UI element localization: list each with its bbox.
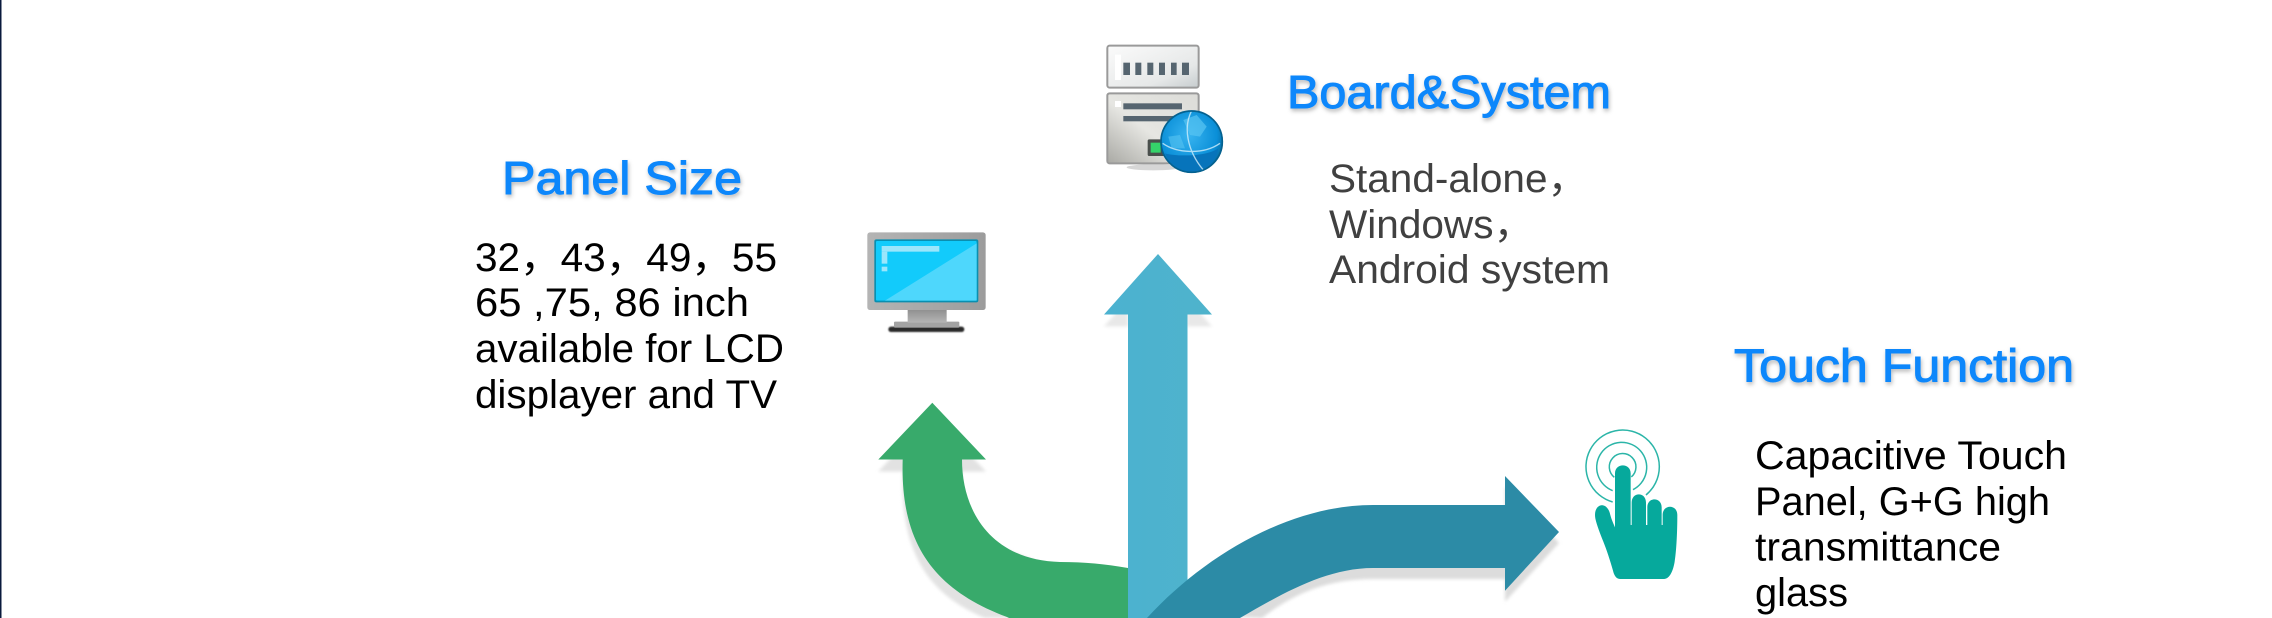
text block: touch function description: Panel, G+G high bbox=[1755, 480, 2050, 524]
hand bbox=[1595, 465, 1677, 579]
icon: monitor bbox=[867, 232, 986, 332]
icon: globe bbox=[1160, 110, 1223, 173]
text block: panel size description: displayer and TV bbox=[475, 373, 777, 417]
arrow: blue vertical up bbox=[1104, 254, 1212, 618]
text block: panel size description bbox=[475, 236, 784, 417]
text block: board and system description: Android system bbox=[1329, 248, 1610, 292]
heading: Board&System: Board&System bbox=[1287, 66, 1611, 118]
text block: touch function description: transmittance bbox=[1755, 526, 2001, 570]
arrow: teal curved right bbox=[1147, 476, 1559, 618]
icon: server with globe bbox=[1107, 46, 1223, 173]
touch rings bbox=[1586, 430, 1659, 502]
text block: panel size description: available for LCD bbox=[475, 327, 784, 371]
text block: touch function description bbox=[1755, 434, 2067, 615]
text block: board and system description: Windows， bbox=[1329, 203, 1534, 247]
arrow: green curved up-left bbox=[878, 403, 1128, 618]
heading: Panel Size: Panel Size bbox=[502, 152, 742, 204]
text block: touch function description: glass bbox=[1755, 571, 1848, 615]
text block: panel size description: 65 ,75, 86 inch bbox=[475, 281, 749, 325]
left border line bbox=[0, 0, 2, 618]
heading: Touch Function: Touch Function bbox=[1734, 340, 2074, 392]
text block: panel size description: 32，43，49，55 bbox=[475, 236, 777, 280]
icon: touch hand bbox=[1586, 430, 1677, 579]
text block: board and system description: Stand-alone， bbox=[1329, 157, 1588, 201]
text block: touch function description: Capacitive Touch bbox=[1755, 434, 2067, 478]
text block: board and system description bbox=[1329, 157, 1610, 292]
